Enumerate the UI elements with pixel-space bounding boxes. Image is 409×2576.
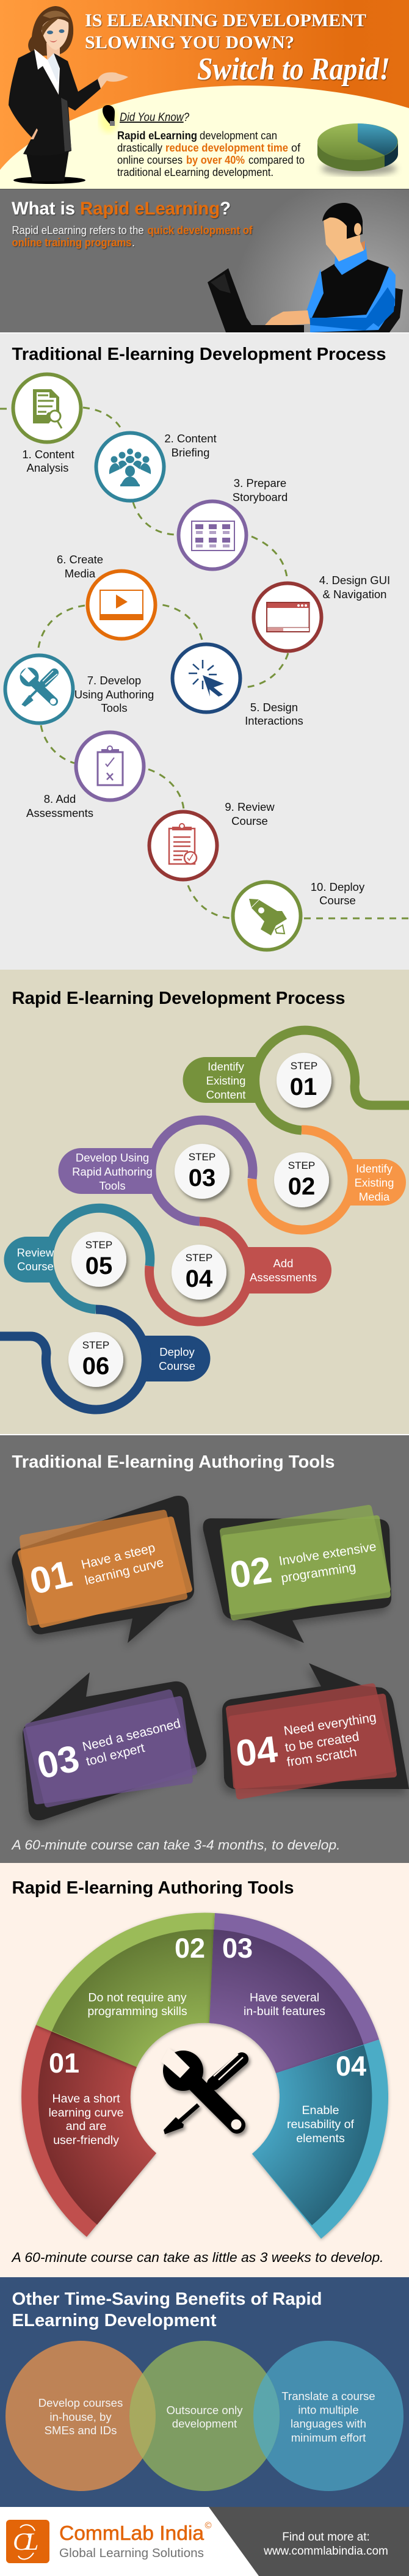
description: online training programs <box>12 236 132 249</box>
step 06: STEP <box>82 1339 109 1351</box>
panel: traditional authoring tools <box>0 1434 409 1863</box>
label: 2. Content <box>164 432 217 445</box>
venn text centre: development <box>172 2417 237 2430</box>
bubble 01: Have a steep <box>80 1541 156 1572</box>
venn text left: Develop courses <box>38 2396 123 2409</box>
bubble 03 <box>23 1672 206 1820</box>
label: 10. Deploy <box>311 880 365 893</box>
segment 04: reusability of <box>287 2118 355 2131</box>
step 02: Existing <box>355 1176 394 1189</box>
step 03 <box>59 1120 253 1221</box>
heading: Rapid E-learning Authoring Tools <box>12 1878 294 1898</box>
step 04: Assessments <box>250 1271 317 1284</box>
title: SLOWING YOU DOWN? <box>85 32 294 53</box>
venn text left: SMEs and IDs <box>45 2424 117 2437</box>
segment 03: in-built features <box>244 2005 325 2018</box>
description: quick development of <box>148 224 253 236</box>
tagline: Global Learning Solutions <box>59 2547 204 2560</box>
step 03: Tools <box>99 1179 126 1192</box>
step 01: Existing <box>206 1074 245 1087</box>
step 03: Develop Using <box>76 1151 149 1164</box>
step 06: Course <box>159 1359 195 1372</box>
segment 01: learning curve <box>48 2106 124 2120</box>
panel: header <box>0 0 409 189</box>
label: Course <box>231 814 268 827</box>
bubble 04: Need everything <box>283 1710 377 1738</box>
step 9: review course <box>149 800 275 880</box>
label: Media <box>65 567 96 580</box>
segment 01: and are <box>66 2120 106 2133</box>
icon: light bulb <box>100 105 118 133</box>
label: 4. Design GUI <box>319 574 390 587</box>
icon: wrench and screwdriver <box>161 2048 243 2134</box>
step 01: STEP <box>291 1060 317 1072</box>
step 02: Identify <box>356 1162 393 1175</box>
segment 01: Have a short <box>52 2092 120 2106</box>
did you know body: development can <box>200 130 277 142</box>
find out more: www.commlabindia.com <box>263 2545 388 2558</box>
step 02: STEP <box>288 1160 315 1171</box>
venn circles <box>5 2341 404 2491</box>
label: 7. Develop <box>87 674 141 687</box>
heading: Traditional E-learning Development Process <box>12 345 386 364</box>
step 02 <box>252 1130 406 1230</box>
bubble 03: 03 <box>34 1737 83 1787</box>
bubble 04: to be created <box>284 1730 360 1755</box>
bubble 02: programming <box>280 1560 357 1586</box>
panel: traditional process <box>0 332 409 970</box>
caption: A 60-minute course can take as little as 3 weeks to develop. <box>10 2250 383 2265</box>
did you know body <box>117 130 305 178</box>
label: 9. Review <box>225 800 275 813</box>
segment 02: Do not require any <box>88 1991 187 2004</box>
label: 8. Add <box>44 792 76 805</box>
segment 03: Have several <box>250 1991 319 2004</box>
label: 5. Design <box>250 701 298 714</box>
step 06: Deploy <box>159 1345 195 1358</box>
venn text left: in-house, by <box>49 2410 112 2423</box>
did you know body: traditional eLearning development. <box>117 166 273 178</box>
pie chart <box>317 123 398 175</box>
heading: Other Time-Saving Benefits of Rapid <box>12 2289 322 2309</box>
did you know body: online courses <box>117 154 183 166</box>
step 5: design interactions <box>172 644 303 727</box>
brand name: CommLab India <box>59 2522 204 2544</box>
step 04 <box>150 1221 331 1322</box>
venn text right: Translate a course <box>281 2390 375 2402</box>
logo mark: L <box>24 2528 38 2555</box>
bubble 02: Involve extensive <box>278 1540 377 1568</box>
find out more: Find out more at: <box>282 2531 370 2544</box>
label: Course <box>319 894 356 907</box>
logo mark: C <box>13 2528 30 2555</box>
step 1: content analysis <box>13 374 81 474</box>
panel: rapid process <box>0 970 409 1434</box>
step 06: 06 <box>82 1353 109 1380</box>
segment 02 <box>36 1913 215 2067</box>
copyright mark: © <box>204 2520 212 2531</box>
step 01: Identify <box>208 1060 245 1073</box>
heading: Rapid E-learning Development Process <box>12 989 345 1008</box>
segment 02: 02 <box>175 1933 205 1964</box>
panel: other time-saving benefits <box>0 2277 409 2507</box>
step 03: 03 <box>189 1165 215 1191</box>
description: Rapid eLearning refers to the <box>12 224 144 236</box>
segment 03: 03 <box>222 1933 253 1964</box>
step 05: 05 <box>85 1253 112 1279</box>
bubble 04: 04 <box>234 1728 280 1774</box>
label: Assessments <box>26 807 93 819</box>
step 01: 01 <box>290 1074 317 1100</box>
step 8: add assessments <box>26 732 144 819</box>
bubble 03: Need a seasoned <box>81 1716 182 1754</box>
bubble 02: 02 <box>227 1548 275 1596</box>
venn text centre: Outsource only <box>166 2404 243 2417</box>
logo mark <box>6 2520 49 2563</box>
panel: what is rapid elearning <box>0 189 409 332</box>
step 02: 02 <box>288 1173 315 1200</box>
did you know heading: Did You Know? <box>120 111 189 124</box>
step 04: 04 <box>186 1265 213 1292</box>
did you know body: compared to <box>248 154 305 166</box>
step 01: Content <box>206 1088 245 1101</box>
segment 04: elements <box>296 2132 345 2145</box>
heading: What is Rapid eLearning? <box>12 199 231 219</box>
step 05: Review <box>17 1246 54 1259</box>
step 02: Media <box>359 1190 390 1203</box>
step 01 <box>183 1030 409 1130</box>
step 05 <box>4 1208 150 1309</box>
step 10: deploy course <box>233 880 365 950</box>
segment 02: programming skills <box>87 2005 187 2018</box>
label: 3. Prepare <box>234 477 286 489</box>
bubble 04: from scratch <box>286 1745 358 1769</box>
panel: rapid authoring tools <box>0 1863 409 2277</box>
heading: Traditional E-learning Authoring Tools <box>12 1452 335 1472</box>
segment 01: user-friendly <box>53 2134 119 2147</box>
step 7: develop using authoring tools <box>5 655 154 723</box>
description <box>12 224 253 249</box>
step 4: design gui and navigation <box>254 574 390 651</box>
label: 6. Create <box>57 553 103 566</box>
step 04: STEP <box>186 1252 212 1264</box>
illustration: man at laptop <box>208 203 403 332</box>
bubble 01: learning curve <box>84 1556 165 1588</box>
title: IS ELEARNING DEVELOPMENT <box>85 10 366 31</box>
step 3: prepare storyboard <box>178 477 288 569</box>
did you know body: Rapid eLearning <box>117 130 197 142</box>
label: Interactions <box>245 714 303 727</box>
step 05: STEP <box>85 1239 112 1251</box>
label: Briefing <box>172 446 209 459</box>
segment 04: 04 <box>336 2051 366 2082</box>
segment 01 <box>21 2025 156 2237</box>
bubble 04 <box>222 1663 409 1796</box>
step 03: Rapid Authoring <box>72 1165 153 1178</box>
dashed path connectors <box>0 408 409 918</box>
label: & Navigation <box>323 588 386 601</box>
step 6: create media <box>57 553 155 639</box>
segment 01: 01 <box>49 2047 79 2079</box>
did you know body: of <box>291 142 301 154</box>
illustration: businesswoman <box>9 6 128 184</box>
heading <box>12 2289 322 2330</box>
did you know body: by over 40% <box>186 154 245 166</box>
description: . <box>132 236 135 249</box>
segment 04: Enable <box>302 2104 339 2117</box>
step 03: STEP <box>189 1151 215 1163</box>
venn text right: minimum effort <box>291 2431 366 2444</box>
bubble 01 <box>12 1496 194 1643</box>
did you know body: drastically <box>117 142 162 154</box>
step 04: Add <box>273 1257 293 1270</box>
label: 1. Content <box>22 448 74 461</box>
bubble 01: 01 <box>26 1553 76 1602</box>
venn text right: into multiple <box>298 2404 359 2416</box>
bubble 03: tool expert <box>85 1741 147 1769</box>
bubble 02 <box>203 1508 391 1643</box>
label: Tools <box>101 701 128 714</box>
caption: A 60-minute course can take 3-4 months, to develop. <box>10 1837 341 1853</box>
step 2: content briefing <box>96 432 217 501</box>
step 05: Course <box>17 1260 54 1273</box>
segment 04 <box>252 2040 388 2239</box>
label: Storyboard <box>233 491 288 503</box>
heading: ELearning Development <box>12 2311 217 2330</box>
label: Using Authoring <box>74 688 154 701</box>
label: Analysis <box>27 461 68 474</box>
segment 03 <box>209 1913 379 2073</box>
venn text right: languages with <box>291 2417 366 2430</box>
step 06 <box>0 1309 210 1410</box>
did you know body: reduce development time <box>165 142 288 154</box>
panel: footer <box>0 2507 409 2576</box>
title <box>85 10 390 87</box>
